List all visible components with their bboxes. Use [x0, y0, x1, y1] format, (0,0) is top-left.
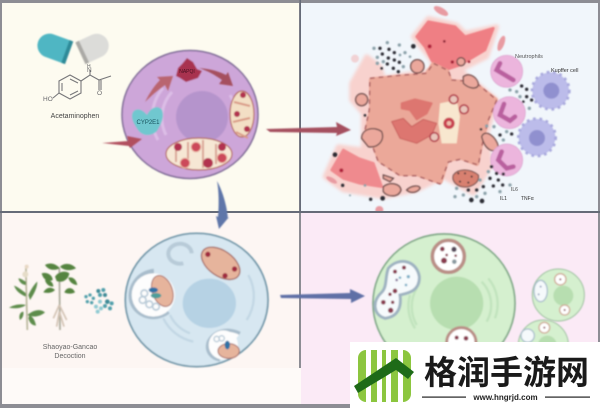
arrow: down to treatment — [216, 181, 229, 229]
stray fragments — [325, 4, 507, 214]
blue recovering cell — [125, 233, 268, 367]
CYP2E1 enzyme — [132, 107, 163, 135]
arrow: into cell — [102, 136, 142, 148]
mitochondrion bottom — [166, 138, 232, 170]
panel: recovered cells — [301, 213, 598, 404]
capsule icon — [34, 30, 113, 64]
Kupffer cells — [519, 72, 569, 156]
nucleus — [183, 279, 236, 328]
nucleus — [176, 91, 228, 143]
NAPQI blob — [176, 58, 202, 82]
small green cell upper — [532, 269, 584, 321]
molecule labels: O — [97, 90, 102, 97]
arrow: acetaminophen to injury — [266, 122, 351, 136]
label: Kupffer cell: Kupffer cell — [551, 68, 578, 74]
molecule labels: HO — [43, 96, 53, 103]
nucleus — [430, 277, 483, 330]
nuclear fragments — [402, 99, 432, 119]
vesicle fragments — [356, 58, 498, 196]
mitochondrion top — [196, 241, 246, 286]
autophagosome left — [131, 271, 177, 317]
label: IL-6: IL6 — [511, 187, 518, 193]
panel: treatment with decoction — [2, 213, 350, 404]
lysosome bottom — [447, 328, 476, 357]
molecule: acetaminophen structure — [53, 70, 111, 99]
label: Shaoyao-Gancao Decoction: Decoction — [54, 353, 86, 360]
arrow: to NAPQI — [145, 76, 173, 102]
lysosome top — [432, 240, 464, 272]
divider lines — [0, 0, 600, 213]
molecule labels: N — [87, 67, 92, 74]
mitochondrion right — [230, 91, 254, 138]
label: neutrophils: Neutrophils — [515, 54, 543, 60]
label: TNF-alpha: TNFα — [521, 196, 534, 202]
arrow: to mitochondrion — [199, 68, 233, 86]
damaged necrotic cell — [325, 4, 569, 214]
fusing autolysosome — [375, 261, 419, 318]
cytokine dots — [333, 40, 533, 203]
small green cell lower — [518, 320, 568, 370]
active compound dots — [84, 288, 114, 314]
panel: acetaminophen metabolism — [2, 3, 299, 211]
large green cell — [373, 234, 515, 373]
herb plant right — [42, 264, 77, 330]
molecule labels: H — [87, 64, 91, 70]
label: IL-1: IL1 — [500, 196, 507, 202]
label: Shaoyao-Gancao Decoction: Shaoyao-Gancao — [43, 344, 97, 351]
purple liver cell — [122, 50, 258, 178]
arrow: treatment to recovery — [280, 289, 365, 303]
label: Acetaminophen: Acetaminophen — [51, 113, 99, 120]
herb plant left — [9, 265, 45, 330]
watermark logo — [354, 350, 414, 402]
watermark — [350, 342, 600, 408]
autophagosome bottom — [207, 330, 240, 360]
watermark URL: www.hngrjd.com — [472, 393, 538, 402]
watermark name: 格润手游网 — [424, 346, 589, 394]
label: CYP2E1: CYP2E1 — [136, 120, 160, 126]
panel: liver injury — [301, 3, 598, 214]
damaged mitochondria — [438, 100, 460, 143]
molecule labels — [43, 64, 102, 103]
neutrophils — [491, 55, 525, 176]
label: NAPQI: NAPQI — [179, 69, 195, 75]
